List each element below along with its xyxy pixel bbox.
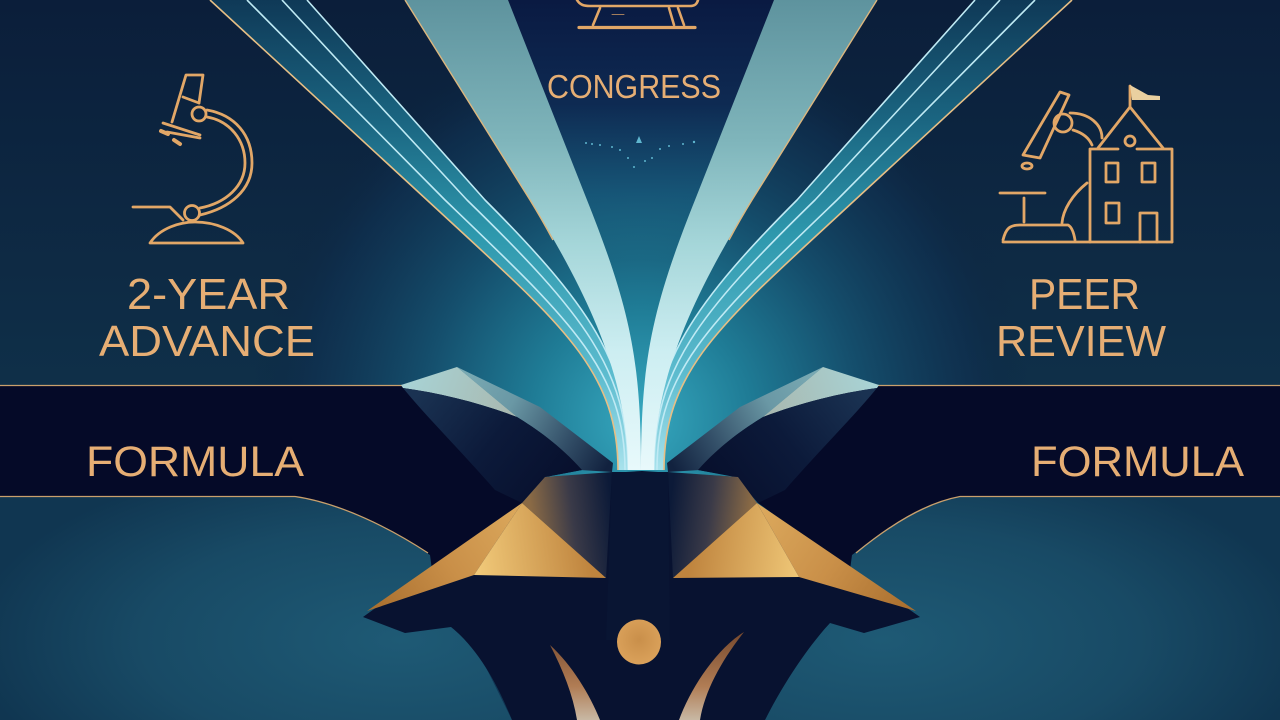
left crescent xyxy=(550,645,600,720)
right heading: peer review: PEER xyxy=(1029,270,1140,319)
left dark band xyxy=(0,386,582,570)
vessel upper right shade xyxy=(668,472,757,578)
right ray fan xyxy=(641,0,1072,470)
right wing xyxy=(667,367,879,503)
vessel base stem xyxy=(363,471,920,720)
left gold facet outer xyxy=(367,503,522,611)
right formula label: FORMULA xyxy=(1031,438,1244,486)
left formula label: FORMULA xyxy=(86,438,304,486)
microscope icon xyxy=(133,75,252,243)
gold circle xyxy=(617,620,661,664)
congress label: CONGRESS xyxy=(547,68,721,105)
right heading: peer review xyxy=(996,270,1166,366)
lower left panel xyxy=(0,497,512,720)
lower right panel xyxy=(765,497,1280,720)
congress icon xyxy=(577,0,698,28)
left wing xyxy=(401,367,613,503)
small dotted mark xyxy=(585,136,695,168)
right gold facet outer xyxy=(757,503,916,611)
right gold facet inner xyxy=(673,503,799,578)
central vessel xyxy=(363,471,920,720)
flag xyxy=(1130,85,1160,100)
right crescent xyxy=(679,632,744,720)
right heading: peer review: REVIEW xyxy=(996,317,1166,366)
vessel center column xyxy=(606,472,670,640)
vessel upper left shade xyxy=(522,472,612,578)
band gold edges xyxy=(0,386,1280,553)
left heading: 2-year advance xyxy=(99,270,315,366)
left heading: 2-year advance: 2-YEAR xyxy=(127,270,290,319)
left heading: 2-year advance: ADVANCE xyxy=(99,317,315,366)
left ray fan xyxy=(210,0,641,470)
right dark band xyxy=(698,386,1280,570)
peer review icon xyxy=(1000,85,1172,242)
left gold facet inner xyxy=(474,503,606,578)
